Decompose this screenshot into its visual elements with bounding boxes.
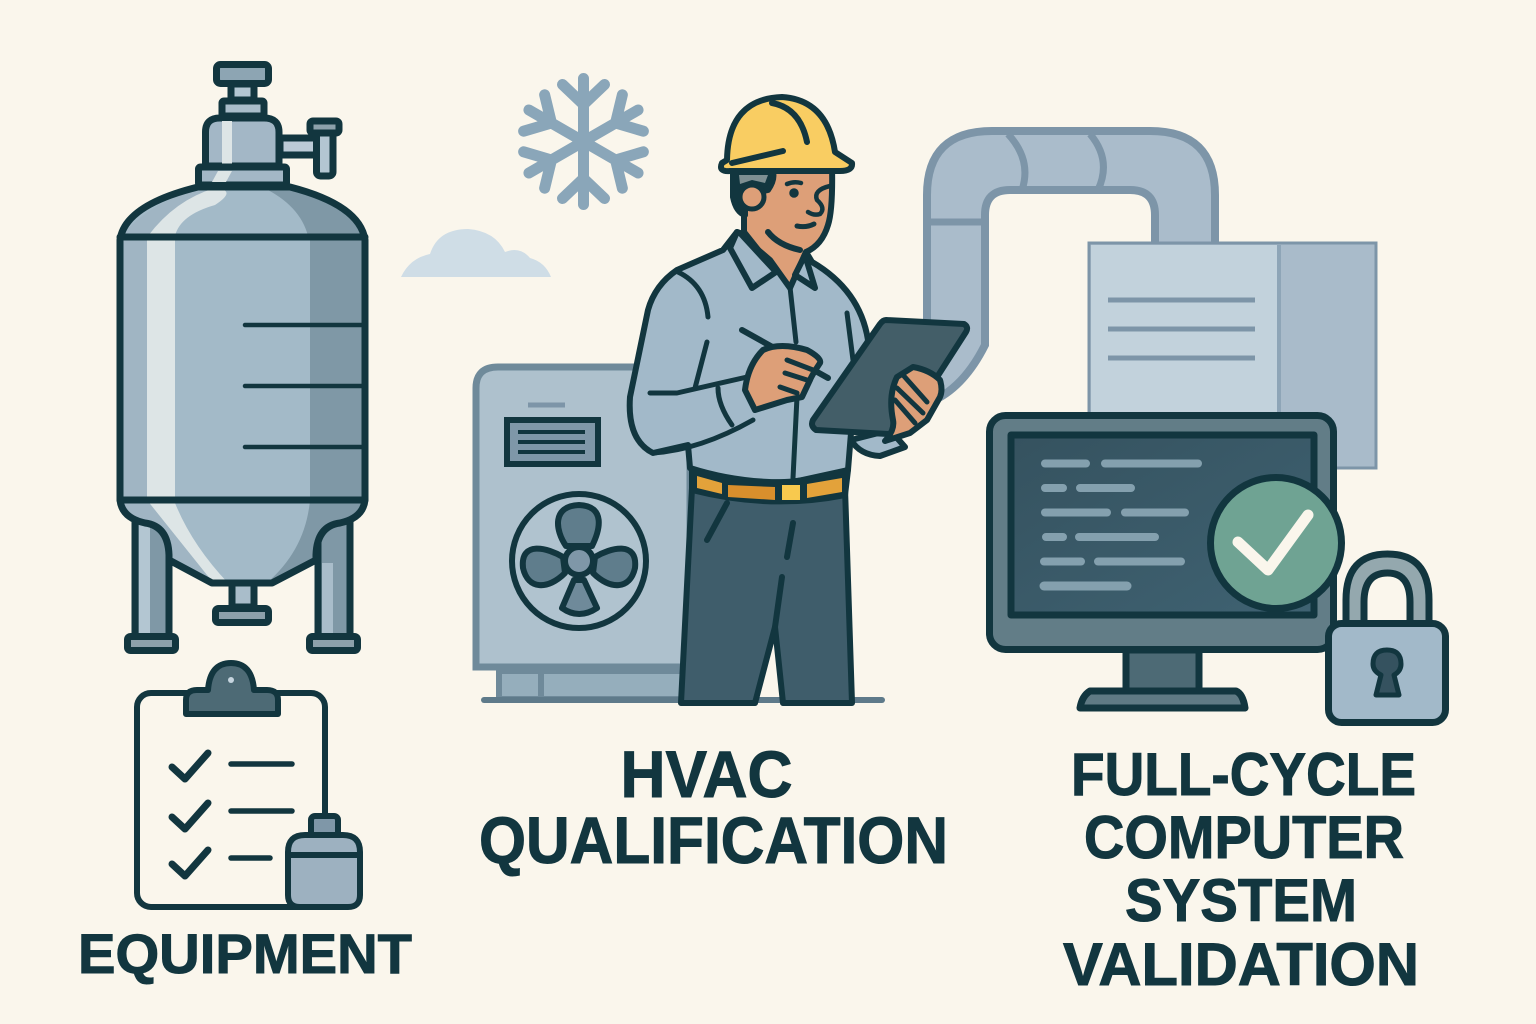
small bottle (288, 816, 360, 907)
icon: cloud (401, 229, 551, 277)
shirt (630, 232, 905, 482)
shirt seams (650, 272, 853, 478)
trousers (681, 488, 852, 703)
label: HVAC qualification: HVAC (620, 737, 792, 811)
label: full-cycle computer system validation: COMPUTER (1084, 804, 1404, 871)
right tank foot (310, 636, 358, 650)
icon: storage tank (118, 64, 370, 650)
icon: snowflake (518, 78, 649, 204)
icon: checklist clipboard (137, 663, 360, 907)
icon: check badge (1210, 478, 1342, 608)
label: full-cycle computer system validation: VALIDATION (1063, 931, 1419, 998)
hair and ear (733, 172, 773, 215)
fan (512, 494, 646, 628)
tank level marks (245, 325, 362, 447)
belt (692, 470, 848, 501)
label: full-cycle computer system validation: FULL-CYCLE (1071, 741, 1416, 808)
monitor stand (1126, 650, 1199, 691)
worker figure (630, 97, 967, 703)
hard hat (721, 97, 852, 171)
label: full-cycle computer system validation: SYSTEM (1125, 867, 1357, 934)
icon: padlock (1328, 554, 1446, 722)
left tank leg (135, 515, 169, 637)
label: HVAC qualification (479, 737, 948, 877)
checklist rows (172, 753, 292, 876)
pen (742, 330, 828, 378)
duct pipe (927, 131, 1215, 400)
unit label plate (507, 420, 598, 464)
tablet (812, 320, 967, 434)
label: full-cycle computer system validation (1063, 741, 1419, 998)
neck and face (744, 165, 832, 290)
document panel (1089, 243, 1376, 468)
tank body (118, 187, 370, 590)
tablet hand (885, 367, 942, 441)
monitor frame (990, 416, 1334, 650)
icon: computer monitor (990, 416, 1334, 708)
label: HVAC qualification: QUALIFICATION (479, 803, 948, 877)
tank top valve (198, 64, 339, 185)
left tank foot (128, 636, 176, 650)
document text lines (1108, 300, 1255, 358)
face features (768, 182, 830, 250)
collar (730, 232, 815, 288)
tank bottom nozzle (216, 583, 268, 622)
clipboard clip (186, 663, 278, 714)
writing hand (745, 346, 820, 410)
HVAC outdoor unit (476, 367, 882, 700)
label: equipment: EQUIPMENT (78, 922, 412, 985)
clipboard board (137, 693, 325, 907)
code lines (1044, 464, 1198, 586)
monitor base (1080, 691, 1245, 708)
screen (1011, 435, 1314, 615)
right tank leg (318, 515, 350, 637)
